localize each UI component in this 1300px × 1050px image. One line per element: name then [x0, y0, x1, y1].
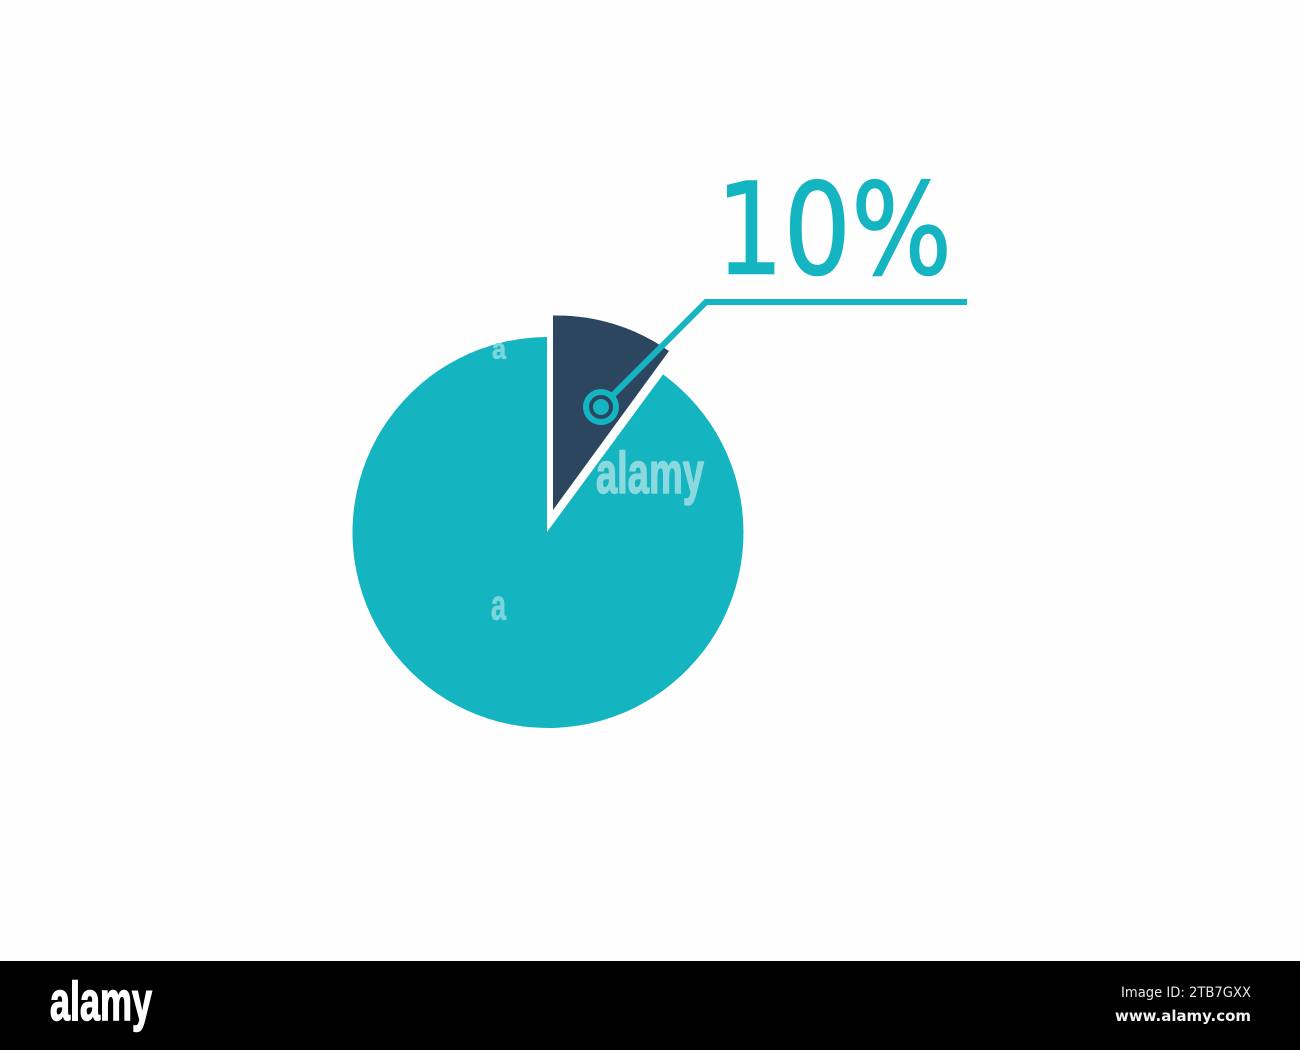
icon: leader marker ring	[586, 392, 616, 422]
watermark: small a upper: a	[492, 334, 507, 366]
footer image id: Image ID: 2TB7GXX	[1121, 985, 1251, 1001]
footer website: www.alamy.com	[1115, 1007, 1251, 1025]
watermark: small a lower: a	[491, 582, 507, 630]
percentage label: 10%	[716, 156, 952, 304]
footer bar	[0, 961, 1300, 1050]
pie chart: 90% teal section	[352, 337, 743, 728]
leader line	[608, 302, 967, 400]
footer logo: alamy	[50, 970, 152, 1032]
pie chart: 10% navy slice	[553, 315, 669, 510]
watermark: alamy on pie: alamy	[596, 441, 704, 506]
